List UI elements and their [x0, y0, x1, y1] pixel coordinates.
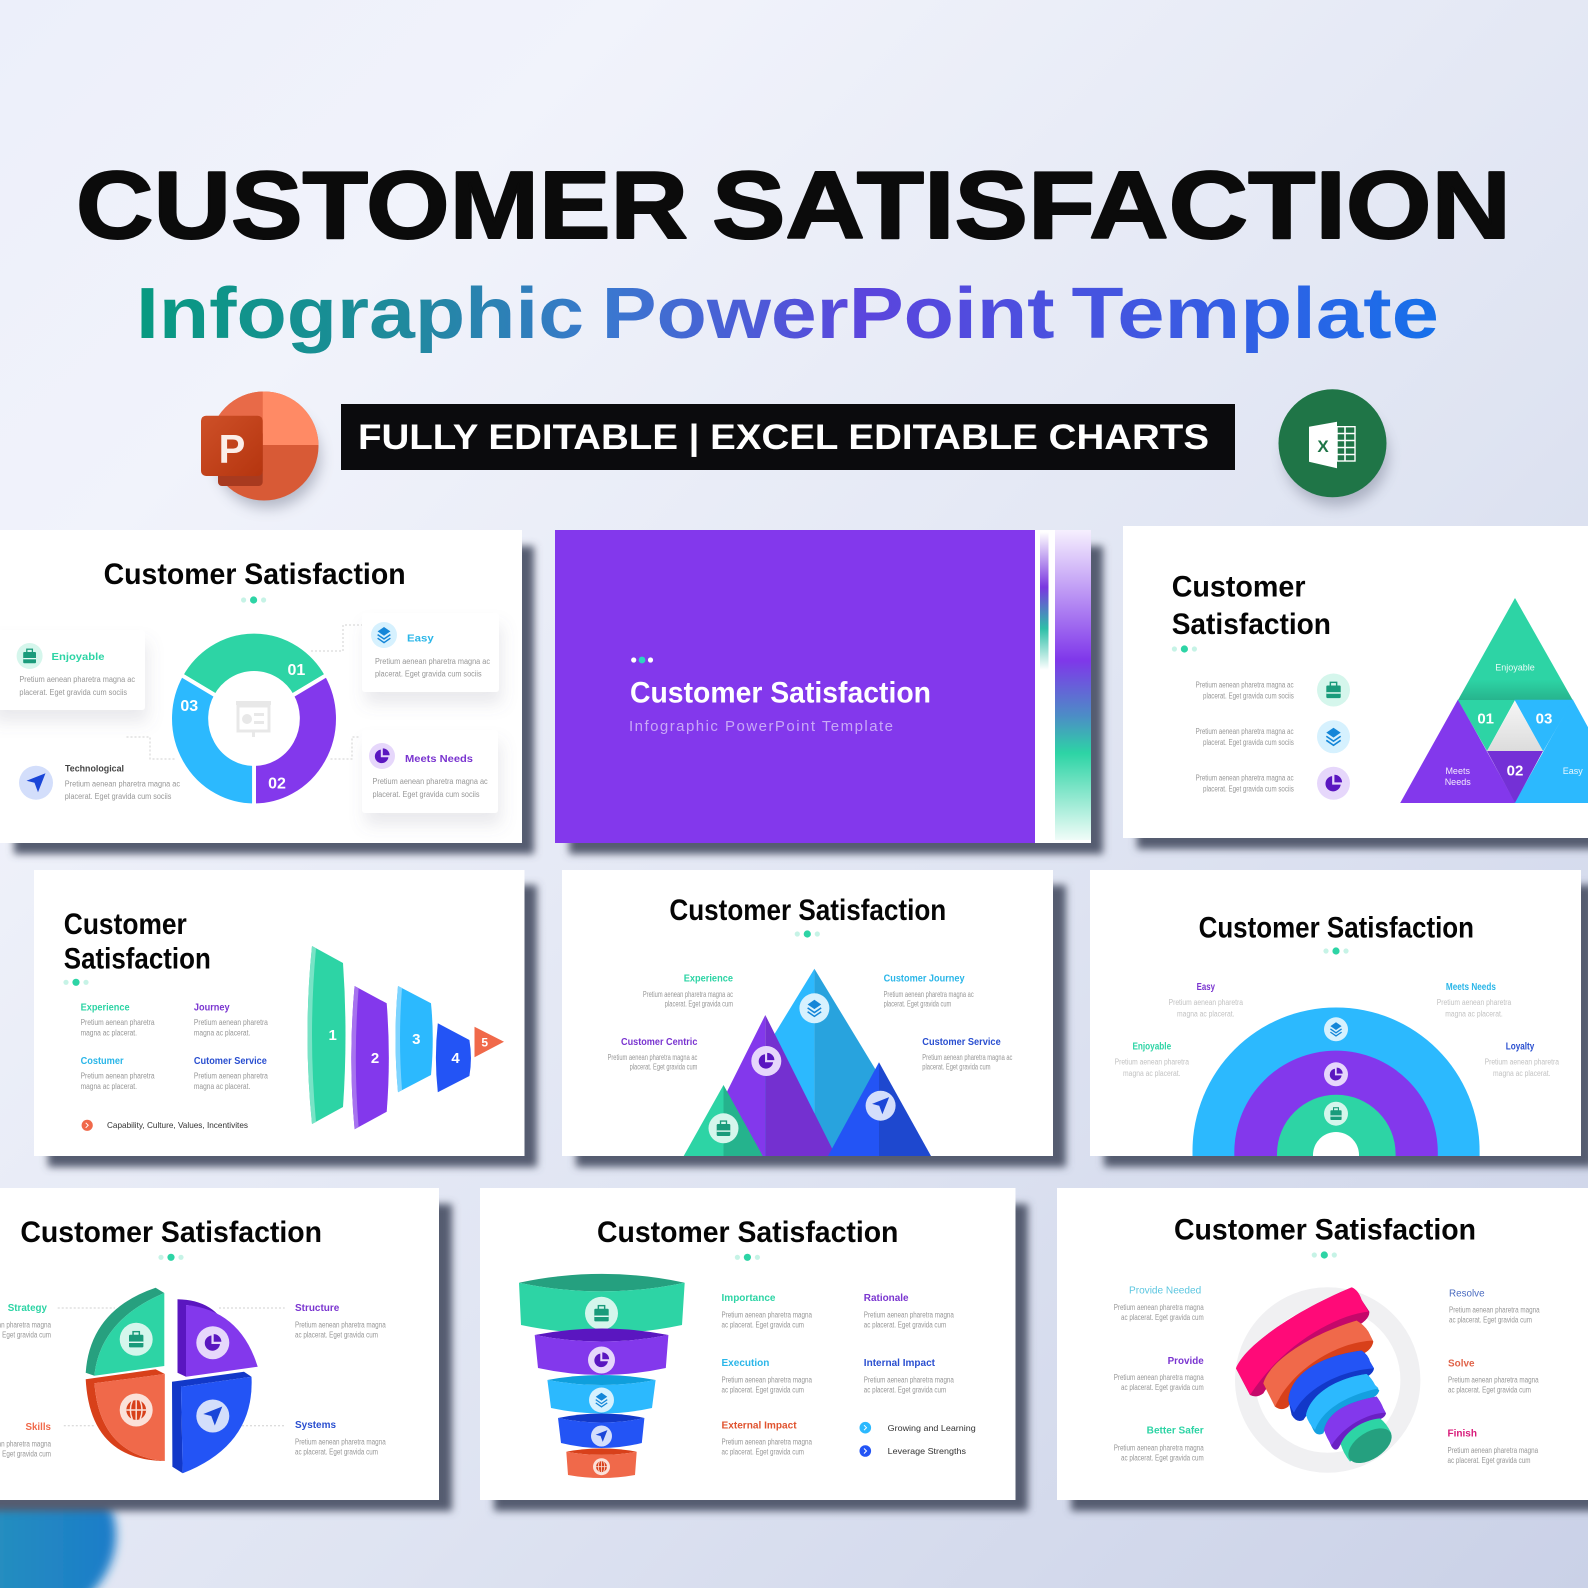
row 1: Pretium aenean pharetra magna ac	[1196, 681, 1294, 690]
segment 3	[396, 986, 433, 1092]
block: Better Safer	[1114, 1426, 1204, 1462]
block: Experience: magna ac placerat.	[81, 1029, 137, 1038]
slide 5: mountains	[562, 870, 1066, 1167]
funnel layer 3	[547, 1375, 656, 1414]
block: Journey	[194, 1003, 268, 1038]
funnel layer 2	[535, 1328, 668, 1375]
slide 3 dots	[1172, 645, 1197, 653]
block: Internal Impact: Internal Impact	[864, 1358, 936, 1369]
block: Resolve: Resolve	[1449, 1288, 1485, 1299]
icon: PowerPoint logo	[201, 391, 320, 508]
block: Finish: Pretium aenean pharetra magna	[1448, 1446, 1539, 1455]
block: Structure	[295, 1303, 386, 1340]
block: Finish	[1448, 1428, 1539, 1465]
block: Provide: Pretium aenean pharetra magna	[1114, 1373, 1204, 1382]
block: Meets Needs: Pretium aenean pharetra	[1437, 998, 1512, 1007]
card: Meets Needs: Meets Needs	[405, 754, 473, 765]
segment 1	[308, 946, 346, 1124]
triangle diagram: Easy	[1563, 766, 1583, 776]
bullet: Leverage Strengths	[860, 1445, 966, 1457]
arches chart	[1192, 1007, 1480, 1156]
slide 9: tilted cone	[1057, 1188, 1588, 1511]
block: Customer Service	[922, 1037, 1012, 1071]
block: Technological: placerat. Eget gravida cum sociis	[65, 792, 171, 801]
block: Enjoyable: Pretium aenean pharetra	[1115, 1057, 1189, 1066]
block: Rationale	[864, 1293, 954, 1329]
slide 4 dots	[63, 979, 89, 986]
block: Provide Needed	[1114, 1285, 1204, 1322]
block: Internal Impact: ac placerat. Eget gravida cum	[864, 1385, 946, 1394]
slide 4: arrow funnel	[34, 870, 537, 1167]
subtitle	[136, 274, 1439, 354]
block: Skills: Skills	[26, 1422, 51, 1433]
triangle diagram: 01	[1477, 710, 1494, 728]
block: Resolve: ac placerat. Eget gravida cum	[1449, 1316, 1532, 1325]
block: Provide: Provide	[1168, 1356, 1204, 1367]
cover title: Customer Satisfaction	[630, 677, 931, 710]
block: Customer Centric: placerat. Eget gravida cum	[630, 1062, 698, 1071]
subtitle: PowerPoint	[602, 274, 1055, 354]
segment 2	[351, 986, 389, 1129]
slide 4 title: Satisfaction	[64, 942, 211, 975]
block: Importance: Pretium aenean pharetra magna	[722, 1310, 812, 1319]
triangle diagram: Needs	[1445, 777, 1471, 787]
row 3: placerat. Eget gravida cum sociis	[1203, 785, 1294, 794]
segment 3: 3	[412, 1031, 420, 1048]
row 3: Pretium aenean pharetra magna ac	[1196, 774, 1294, 783]
block: Resolve	[1449, 1288, 1540, 1325]
block: Provide Needed: ac placerat. Eget gravida cum	[1121, 1313, 1204, 1322]
block: Structure: ac placerat. Eget gravida cum	[295, 1331, 378, 1340]
pie quarter: purple	[178, 1299, 258, 1377]
main title	[76, 152, 1511, 259]
block: Systems	[295, 1420, 386, 1456]
bullet note: Capability, Culture, Values, Incentivites	[107, 1120, 248, 1130]
block: Importance	[722, 1293, 812, 1329]
block: Meets Needs	[1437, 982, 1512, 1019]
card: Meets Needs	[362, 730, 498, 813]
block: Cutomer Service: Pretium aenean pharetra	[194, 1071, 268, 1080]
decorative blue blob	[0, 1440, 116, 1588]
row 2: Pretium aenean pharetra magna ac	[1196, 727, 1294, 736]
block: Cutomer Service: Cutomer Service	[194, 1056, 267, 1067]
row 1: placerat. Eget gravida cum sociis	[1203, 692, 1294, 701]
pie quarter: teal	[86, 1288, 164, 1376]
block: Enjoyable: magna ac placerat.	[1123, 1069, 1181, 1078]
block: Provide	[1114, 1356, 1204, 1392]
block: Customer Journey: placerat. Eget gravida cum	[884, 999, 952, 1008]
block: Internal Impact	[864, 1358, 954, 1394]
slide 9 title: Customer Satisfaction	[1174, 1213, 1476, 1246]
block: Loyalty	[1485, 1041, 1559, 1078]
block: Strategy: Strategy	[8, 1303, 47, 1314]
row 2: placerat. Eget gravida cum sociis	[1203, 738, 1294, 747]
block: Loyalty: Loyalty	[1506, 1041, 1535, 1052]
icon: Excel logo: X	[1317, 437, 1329, 456]
card: Easy: placerat. Eget gravida cum sociis	[375, 670, 482, 679]
block: Easy	[1169, 982, 1243, 1019]
block: Experience	[81, 1003, 155, 1038]
block: Customer Journey: Customer Journey	[884, 974, 965, 985]
slide 8: funnel	[480, 1188, 1028, 1511]
block: Provide: ac placerat. Eget gravida cum	[1121, 1383, 1204, 1392]
block: Systems: ac placerat. Eget gravida cum	[295, 1447, 378, 1456]
card: Enjoyable	[0, 630, 145, 710]
block: Journey: Pretium aenean pharetra	[194, 1018, 268, 1027]
block: Finish: ac placerat. Eget gravida cum	[1448, 1456, 1531, 1465]
triangle diagram: 03	[1536, 710, 1552, 728]
block: Customer Centric: Customer Centric	[621, 1037, 698, 1048]
cover subtitle: Infographic PowerPoint Template	[629, 718, 893, 735]
block: Customer Service: Pretium aenean pharetra magna ac	[922, 1053, 1012, 1062]
row 3	[1196, 767, 1350, 800]
segment 4: 4	[451, 1050, 460, 1067]
block: Technological: Pretium aenean pharetra magna ac	[65, 780, 180, 789]
banner: fully editable	[341, 404, 1235, 470]
pie quarter: blue	[172, 1372, 252, 1473]
block: Loyalty: Pretium aenean pharetra	[1485, 1057, 1559, 1066]
main title: SATISFACTION	[712, 152, 1511, 259]
block: Solve: Pretium aenean pharetra magna	[1448, 1376, 1539, 1385]
block: Structure: Structure	[295, 1303, 340, 1314]
block: Skills	[0, 1422, 51, 1459]
main title: CUSTOMER	[76, 152, 688, 259]
slide 6 dots	[1323, 947, 1349, 955]
bullet: Leverage Strengths: Leverage Strengths	[888, 1446, 966, 1456]
funnel layer 4	[558, 1414, 644, 1448]
block: Execution	[722, 1358, 812, 1394]
block: Customer Centric: Pretium aenean pharetra magna ac	[608, 1053, 697, 1062]
card: Enjoyable: placerat. Eget gravida cum sociis	[19, 688, 127, 697]
block: Systems: Systems	[295, 1420, 336, 1431]
block: Easy: Pretium aenean pharetra	[1169, 998, 1243, 1007]
segment 5: 5	[481, 1036, 488, 1050]
slide 3 title	[1172, 571, 1331, 641]
block: Experience: placerat. Eget gravida cum	[665, 999, 733, 1008]
block: Better Safer: Better Safer	[1147, 1426, 1204, 1437]
block: Meets Needs: magna ac placerat.	[1445, 1010, 1503, 1019]
block: Systems: Pretium aenean pharetra magna	[295, 1437, 386, 1446]
bullet: Growing and Learning: Growing and Learning	[888, 1423, 976, 1433]
block: Experience	[643, 974, 733, 1008]
block: Strategy	[0, 1303, 51, 1340]
donut labels: 01	[288, 662, 305, 679]
card: Enjoyable: Pretium aenean pharetra magna ac	[19, 675, 135, 684]
block: Solve: ac placerat. Eget gravida cum	[1448, 1386, 1531, 1395]
block: Importance: ac placerat. Eget gravida cum	[722, 1320, 804, 1329]
block: Execution: Pretium aenean pharetra magna	[722, 1375, 812, 1384]
slide 1 title: Customer Satisfaction	[104, 558, 406, 591]
block: Resolve: Pretium aenean pharetra magna	[1449, 1306, 1540, 1315]
block: Rationale: ac placerat. Eget gravida cum	[864, 1320, 946, 1329]
segment 4	[436, 1023, 471, 1092]
tilted cone	[1236, 1287, 1398, 1470]
gray ring	[1245, 1297, 1410, 1463]
card: Meets Needs: placerat. Eget gravida cum sociis	[372, 790, 480, 799]
triangle diagram: Enjoyable	[1495, 663, 1535, 673]
icon: presentation board	[236, 701, 271, 737]
slide 1 dots	[241, 596, 266, 604]
slide 4 title: Customer	[64, 908, 187, 941]
slide 2: cover	[555, 530, 1103, 854]
block: Rationale: Pretium aenean pharetra magna	[864, 1310, 954, 1319]
cover dots	[631, 657, 653, 663]
card: Easy	[362, 613, 499, 692]
funnel layer 5	[566, 1448, 637, 1478]
block: Execution: ac placerat. Eget gravida cum	[722, 1385, 804, 1394]
mountain: deep blue	[828, 1062, 931, 1156]
block: Customer Journey	[884, 974, 974, 1008]
block: Experience: Experience	[684, 974, 733, 985]
banner: fully editable: FULLY EDITABLE | EXCEL EDITABLE CHARTS	[358, 418, 1209, 457]
pie quarter: orange	[86, 1369, 165, 1461]
block: Internal Impact: Pretium aenean pharetra magna	[864, 1375, 954, 1384]
block: Journey: Journey	[194, 1003, 230, 1014]
block: Solve	[1448, 1358, 1539, 1395]
block: Easy: magna ac placerat.	[1177, 1010, 1235, 1019]
donut labels: 02	[268, 776, 286, 792]
slide 3: triangle	[1123, 526, 1588, 849]
block: Journey: magna ac placerat.	[194, 1029, 250, 1038]
slide 7 dots	[158, 1254, 184, 1261]
row 2	[1196, 720, 1350, 753]
donut labels	[180, 662, 305, 792]
slide 9 dots	[1312, 1251, 1337, 1259]
block: Customer Service: Customer Service	[922, 1037, 1001, 1048]
block: Better Safer: Pretium aenean pharetra magna	[1114, 1443, 1204, 1452]
card: Easy: Pretium aenean pharetra magna ac	[375, 657, 490, 666]
slide 7: split pie	[0, 1188, 452, 1511]
row 1	[1196, 674, 1350, 706]
block: Importance: Importance	[722, 1293, 776, 1304]
mountain: purple	[695, 1015, 836, 1156]
block: Enjoyable	[1115, 1041, 1189, 1078]
block: Execution: Execution	[722, 1358, 769, 1369]
block: Experience: Pretium aenean pharetra magna ac	[643, 990, 733, 999]
triangle diagram: 02	[1507, 762, 1523, 780]
block: Experience: Experience	[81, 1003, 130, 1014]
slide 5 dots	[795, 930, 820, 938]
icon: Excel logo	[1278, 389, 1388, 506]
block: Customer Service: placerat. Eget gravida cum	[922, 1062, 991, 1071]
triangle diagram	[1401, 598, 1588, 803]
card: Easy: Easy	[407, 634, 434, 645]
slide 8 dots	[735, 1254, 760, 1261]
subtitle: Template	[1072, 274, 1439, 354]
block: Cutomer Service	[194, 1056, 268, 1091]
slide 3 title: Customer	[1172, 571, 1306, 604]
card: Enjoyable: Enjoyable	[52, 652, 105, 663]
block: Experience: Pretium aenean pharetra	[81, 1018, 155, 1027]
block: Provide Needed: Pretium aenean pharetra magna	[1114, 1303, 1204, 1312]
slide 6 title: Customer Satisfaction	[1199, 911, 1474, 944]
block: External Impact: External Impact	[722, 1420, 797, 1431]
bullet: Growing and Learning	[860, 1422, 976, 1433]
block: Customer Journey: Pretium aenean pharetra magna ac	[884, 990, 974, 999]
mountain: teal	[684, 1085, 763, 1156]
block: Technological: Technological	[65, 764, 124, 774]
segment 1: 1	[329, 1027, 337, 1044]
donut labels: 03	[180, 698, 198, 715]
block: Costumer: Pretium aenean pharetra	[81, 1071, 155, 1080]
block: Costumer: magna ac placerat.	[81, 1082, 137, 1091]
card: Meets Needs: Pretium aenean pharetra magna ac	[372, 777, 488, 786]
slide 6: rainbow arches	[1090, 870, 1588, 1167]
triangle diagram: Meets	[1445, 766, 1470, 776]
block: Solve: Solve	[1448, 1358, 1475, 1369]
block: External Impact: ac placerat. Eget gravida cum	[722, 1447, 804, 1456]
block: Rationale: Rationale	[864, 1293, 909, 1304]
block: Customer Centric	[608, 1037, 698, 1071]
block: Better Safer: ac placerat. Eget gravida cum	[1121, 1453, 1204, 1462]
slide 4 title	[64, 908, 211, 975]
block: Finish: Finish	[1448, 1428, 1477, 1439]
block: Structure: Pretium aenean pharetra magna	[295, 1321, 386, 1330]
slide 8 title: Customer Satisfaction	[597, 1216, 898, 1249]
block: External Impact	[722, 1420, 812, 1456]
block: Loyalty: magna ac placerat.	[1493, 1069, 1551, 1078]
block: Meets Needs: Meets Needs	[1446, 982, 1496, 993]
icon: PowerPoint logo: P	[219, 428, 245, 472]
block: Cutomer Service: magna ac placerat.	[194, 1082, 250, 1091]
block: Technological	[19, 764, 180, 801]
block: Costumer: Costumer	[81, 1056, 124, 1067]
subtitle: Infographic	[136, 274, 584, 354]
funnel layer 1	[519, 1274, 685, 1334]
donut chart	[170, 632, 338, 806]
block: Provide Needed: Provide Needed	[1129, 1285, 1201, 1296]
block: External Impact: Pretium aenean pharetra magna	[722, 1437, 812, 1446]
slide 5 title: Customer Satisfaction	[669, 894, 946, 927]
slide 1: donut chart	[0, 530, 534, 854]
block: Easy: Easy	[1197, 982, 1215, 993]
block: Enjoyable: Enjoyable	[1132, 1041, 1171, 1052]
slide 3 title: Satisfaction	[1172, 608, 1331, 641]
segment 5	[474, 1027, 504, 1057]
block: Costumer	[81, 1056, 155, 1091]
slide 7 title: Customer Satisfaction	[20, 1216, 322, 1249]
mountain: blue	[700, 969, 928, 1156]
segment 2: 2	[371, 1050, 379, 1067]
